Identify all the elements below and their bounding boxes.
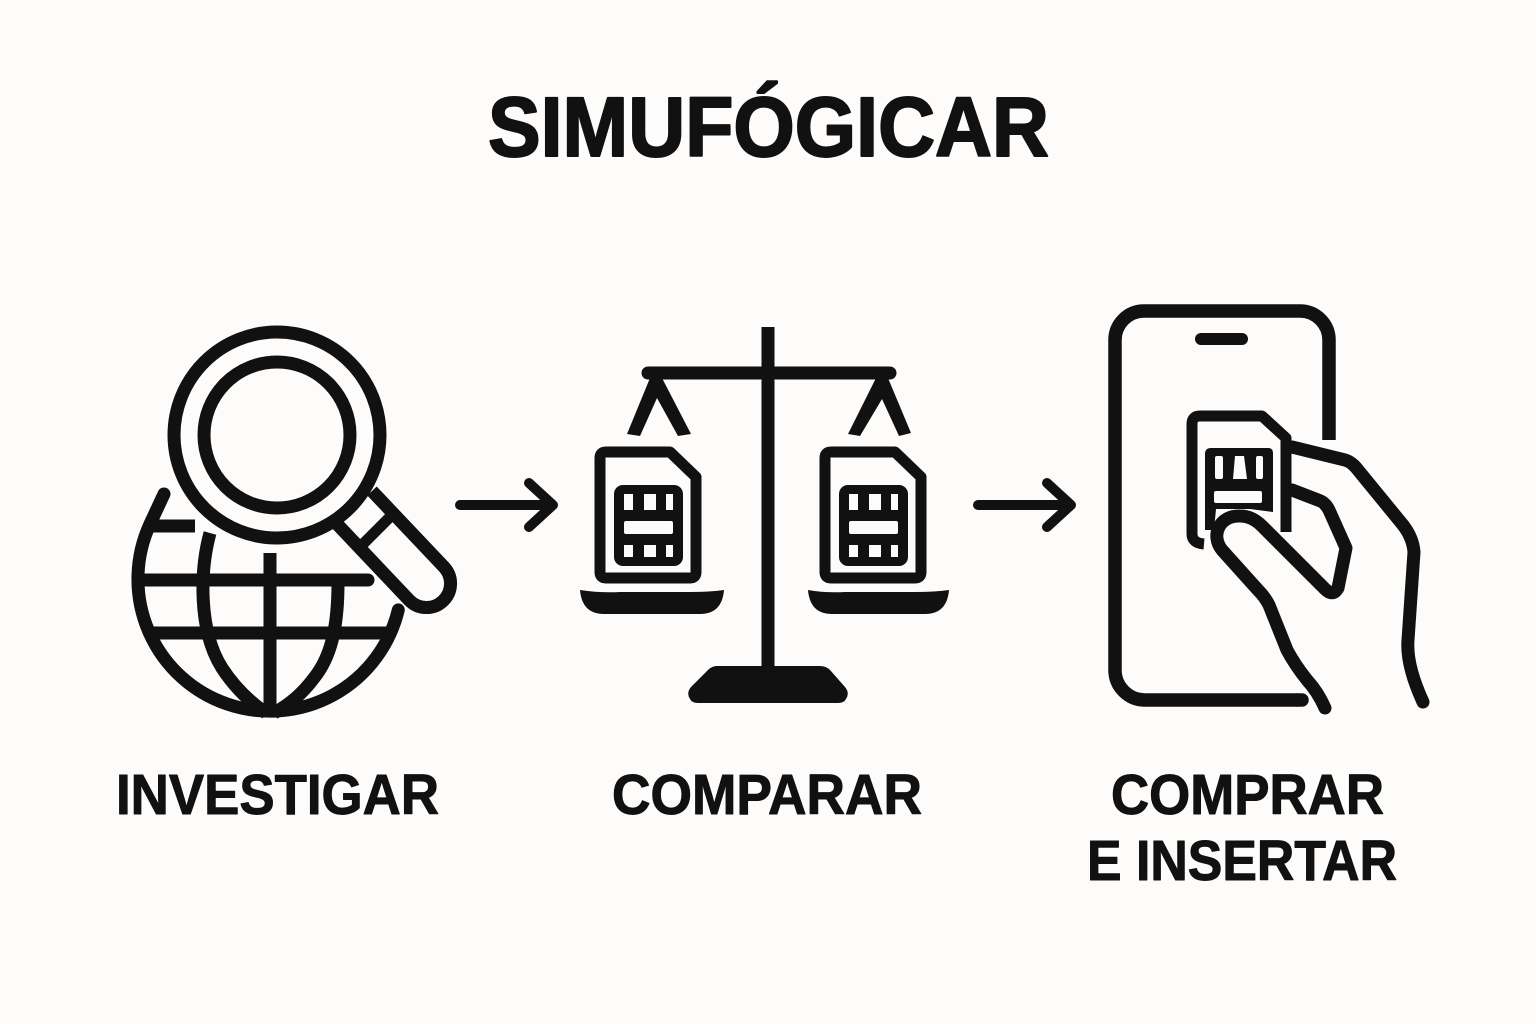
arrow: comparar to comprar	[978, 483, 1071, 527]
SIM in hand	[1192, 416, 1286, 544]
globe	[138, 494, 398, 713]
label: comprar e insertar	[1087, 763, 1397, 893]
right scale pan	[808, 590, 949, 614]
icon: globe with magnifying glass	[138, 332, 451, 713]
icon: balance scale with SIM cards	[580, 327, 949, 703]
label: comprar e insertar: COMPRAR	[1111, 763, 1384, 827]
phone speaker	[1201, 333, 1242, 345]
scale base	[688, 666, 848, 703]
right SIM card	[825, 452, 921, 578]
magnifying glass	[174, 332, 451, 608]
hand	[1217, 447, 1423, 708]
icon: phone with hand inserting SIM	[1115, 311, 1423, 708]
label: comprar e insertar: E INSERTAR	[1087, 829, 1397, 893]
left scale hanger	[627, 378, 691, 436]
phone outline	[1115, 311, 1329, 700]
left SIM card	[600, 452, 696, 578]
label: comparar: COMPARAR	[612, 763, 922, 827]
label: investigar: INVESTIGAR	[116, 763, 439, 827]
left scale pan	[580, 590, 724, 614]
arrow: investigar to comparar	[460, 483, 553, 527]
scale pole and beam	[648, 327, 890, 670]
title: SIMUFÓGICAR	[488, 80, 1049, 174]
right scale hanger	[848, 378, 911, 436]
